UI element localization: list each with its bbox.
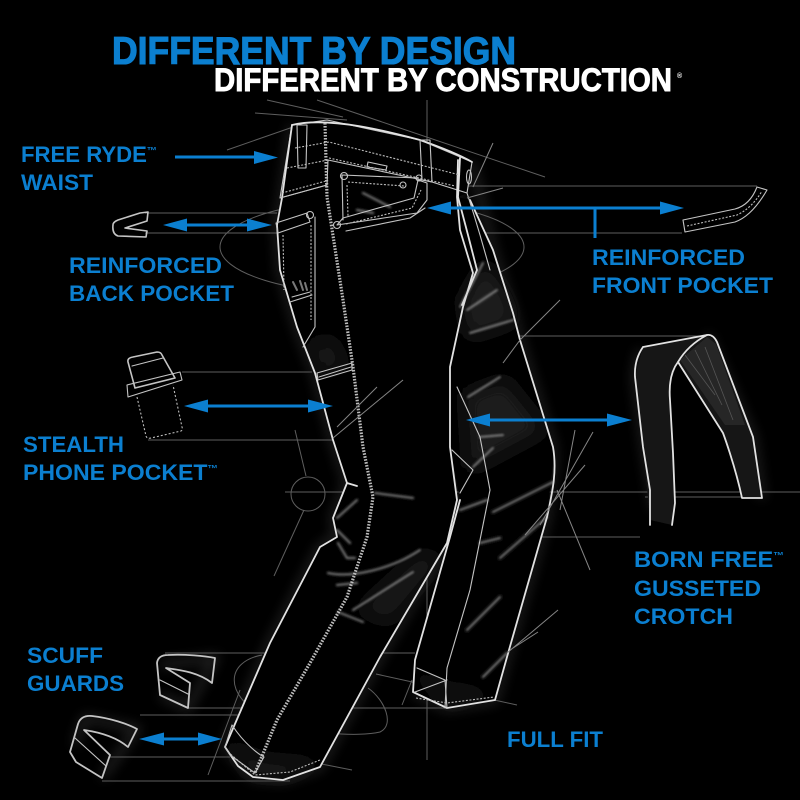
lower cuff xyxy=(70,716,137,778)
far leg outlines xyxy=(413,200,555,708)
label: stealth phone pocket xyxy=(23,432,218,485)
arrow: scuff guards xyxy=(139,732,222,746)
label: reinforced back pocket xyxy=(69,253,235,306)
label: reinforced front pocket xyxy=(592,245,774,298)
label: free ryde waist: ™ xyxy=(147,146,157,157)
side seam xyxy=(255,123,373,773)
arrow: front pocket width xyxy=(427,202,684,238)
label: born free gusseted crotch: GUSSETED xyxy=(634,576,761,601)
arrow: phone pocket xyxy=(184,400,333,412)
near leg shading xyxy=(225,340,545,778)
label: free ryde waist xyxy=(21,142,157,195)
arrow: free ryde waist xyxy=(175,151,278,164)
cuff near leg xyxy=(225,725,264,773)
near leg fill xyxy=(225,120,473,780)
label: free ryde waist: WAIST xyxy=(21,170,94,195)
construction guide lines xyxy=(102,100,800,781)
label: born free gusseted crotch: BORN FREE xyxy=(634,547,764,572)
heading: different by construction: DIFFERENT BY CONSTRUCTION xyxy=(214,62,672,98)
far leg fill xyxy=(413,197,553,708)
waistband and yoke shading xyxy=(280,120,472,198)
front pocket xyxy=(337,180,427,225)
jeans illustration xyxy=(225,120,593,780)
heading: different by design: DIFFERENT BY DESIGN xyxy=(112,30,516,73)
phone xyxy=(128,352,175,388)
back pocket xyxy=(303,217,315,347)
label: stealth phone pocket: STEALTH xyxy=(23,432,124,457)
label: stealth phone pocket: ™ xyxy=(208,464,218,475)
knee pocket xyxy=(317,363,352,380)
registered mark: ® xyxy=(677,72,683,80)
title xyxy=(112,30,683,98)
arrow: gusset xyxy=(466,414,632,426)
fly and front seam xyxy=(458,158,477,305)
label: scuff guards: SCUFF xyxy=(27,643,103,668)
label: scuff guards: GUARDS xyxy=(27,671,124,696)
label: reinforced front pocket: REINFORCED xyxy=(592,245,745,270)
highlights and folds xyxy=(328,193,553,677)
cutout: stealth phone pocket xyxy=(127,352,182,438)
label: free ryde waist: FREE RYDE xyxy=(21,142,146,167)
cutout: born free gusset xyxy=(635,335,762,525)
near leg outlines xyxy=(277,125,347,483)
cutout: back pocket band xyxy=(113,212,148,237)
far leg thigh shading xyxy=(464,265,514,335)
label: born free gusseted crotch: CROTCH xyxy=(634,604,733,629)
label: full fit: FULL FIT xyxy=(507,727,604,752)
yoke and belt loops xyxy=(280,185,327,198)
hidden pocket outline xyxy=(137,385,182,438)
label: reinforced front pocket: FRONT POCKET xyxy=(592,273,774,298)
pocket band xyxy=(127,372,182,397)
label: reinforced back pocket: BACK POCKET xyxy=(69,281,235,306)
label: reinforced back pocket: REINFORCED xyxy=(69,253,222,278)
cutout: scuff guards xyxy=(70,655,215,778)
cutout: reinforced front pocket band xyxy=(683,187,767,232)
label: born free gusseted crotch: ™ xyxy=(773,551,784,562)
label: scuff guards xyxy=(27,643,124,696)
upper cuff xyxy=(157,655,215,708)
label: stealth phone pocket: PHONE POCKET xyxy=(23,460,199,485)
sketch strokes xyxy=(333,143,593,653)
label: born free gusseted crotch xyxy=(634,547,784,629)
arrow: back pocket width xyxy=(163,218,272,232)
jeans glow halo xyxy=(75,125,762,780)
